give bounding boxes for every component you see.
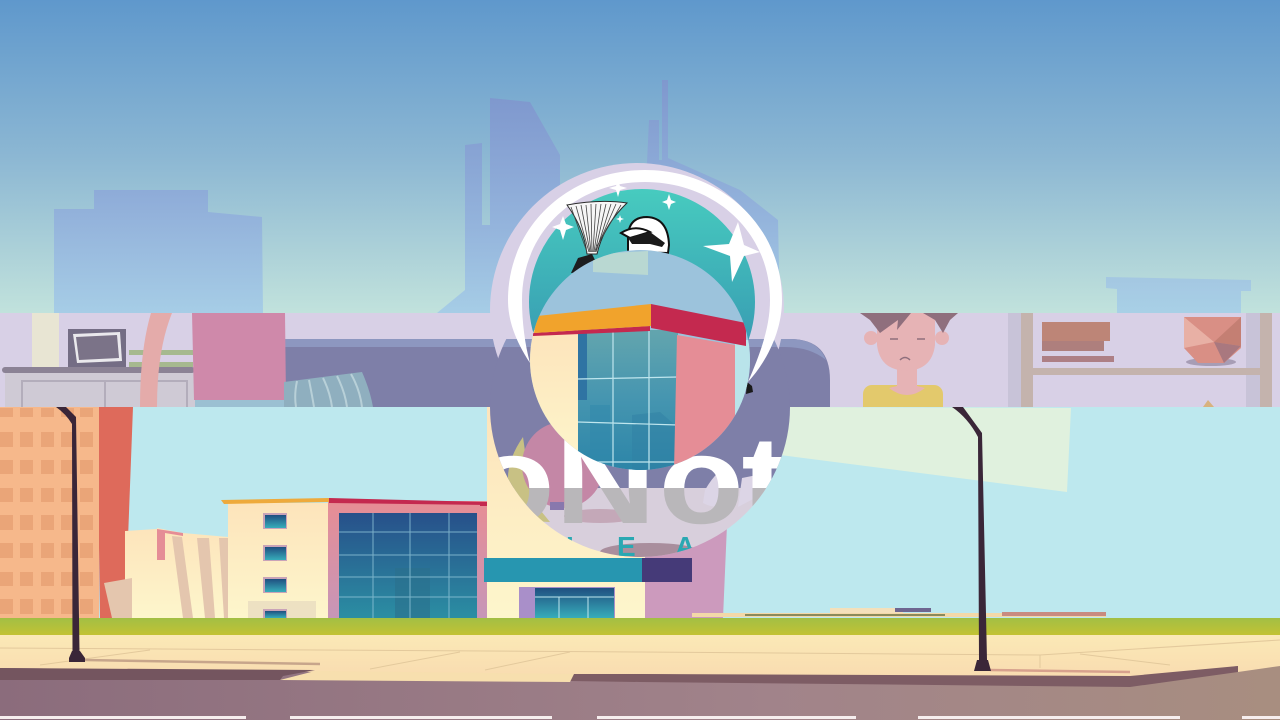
- wordmark: oNot: [469, 411, 788, 550]
- ground: grass, pavement and road: [0, 618, 1280, 720]
- lilac reveal circle: [490, 163, 784, 457]
- lower reveal circle with room scene: [490, 339, 790, 557]
- road: [0, 666, 1280, 720]
- distant flat rooftops: [692, 608, 1106, 617]
- street lamp: right: [952, 407, 991, 671]
- lane markings: [0, 716, 1280, 719]
- orange tower building: [0, 407, 133, 618]
- storefront window: [519, 587, 615, 618]
- shadow under ball: [564, 509, 622, 523]
- green books: [129, 350, 193, 367]
- teal logo disc: [529, 180, 760, 415]
- white ring: [508, 170, 782, 382]
- logo reveal group: [469, 163, 790, 568]
- stacked books: [1042, 322, 1114, 362]
- pink cushion: [192, 313, 286, 400]
- pavement: [0, 635, 1280, 685]
- red roof: [651, 304, 746, 346]
- pink ball: [508, 422, 604, 522]
- orange roof: [534, 304, 651, 333]
- mop: [567, 201, 627, 273]
- mint translucent panel: [780, 407, 1071, 492]
- tagline: E: [617, 531, 636, 562]
- interior band: living room strip: [0, 313, 1280, 425]
- cabinet: [2, 367, 195, 411]
- sparkles: [552, 180, 760, 282]
- sofa: [284, 339, 830, 407]
- cleaner with cap: [621, 217, 669, 253]
- skyline silhouettes: [54, 80, 1251, 313]
- glass office building: [221, 498, 487, 618]
- picture frame: [68, 329, 126, 367]
- inner building ellipse: [530, 250, 755, 470]
- central cream storefront: [480, 407, 727, 618]
- lower sky panel: [0, 407, 1280, 619]
- small cat figure: [703, 475, 752, 506]
- candle: [32, 313, 59, 368]
- low cream buildings: [104, 528, 239, 618]
- grass: [0, 618, 1280, 635]
- shelf: [1008, 313, 1272, 407]
- dark sliver: [746, 382, 753, 394]
- striped cushion: [284, 372, 373, 407]
- pale strip under cushion: [195, 400, 285, 407]
- sky background: [0, 0, 1280, 313]
- faceted vase: [1184, 317, 1241, 366]
- street lamp: left: [56, 407, 85, 662]
- tagline: L: [566, 531, 583, 562]
- storefront sign: [484, 558, 692, 582]
- pink lamp arc: [140, 313, 172, 407]
- tagline: A: [675, 531, 695, 562]
- sad boy: [860, 313, 958, 425]
